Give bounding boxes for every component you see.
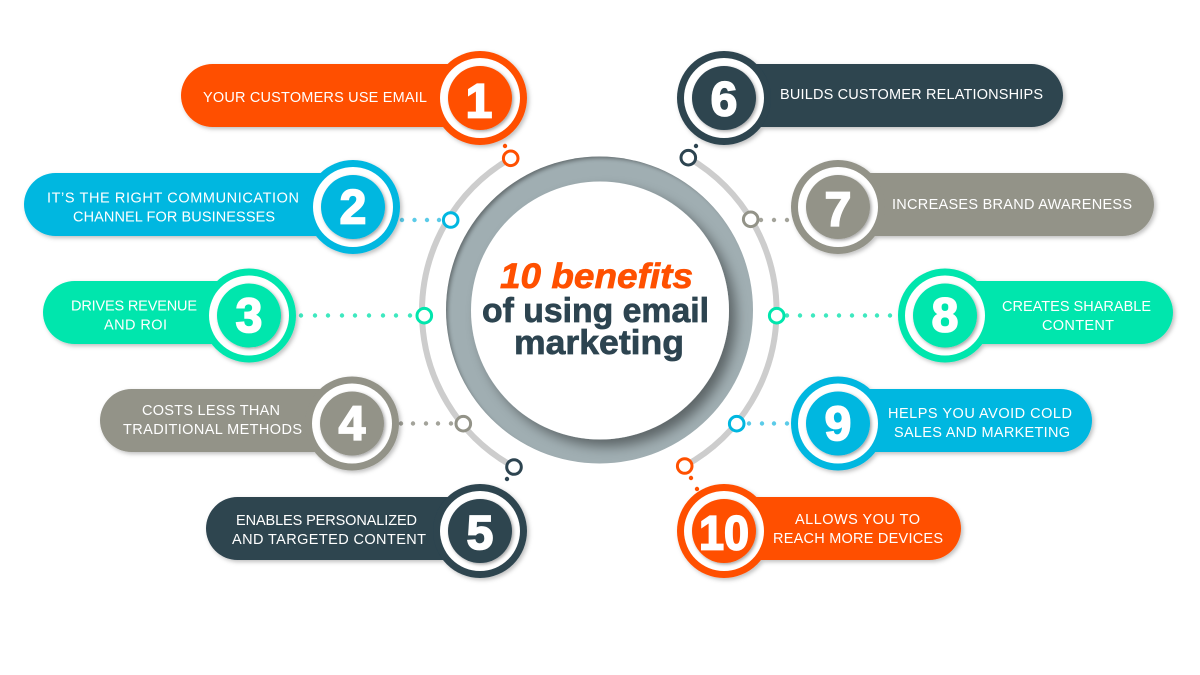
- node 6: [681, 150, 696, 165]
- benefit 8: 8: [932, 290, 958, 342]
- benefit 5: ENABLES PERSONALIZED: [236, 513, 417, 529]
- benefit 8: CREATES SHARABLE: [1002, 299, 1151, 315]
- benefit 6: [677, 51, 1063, 145]
- benefit 9: SALES AND MARKETING: [894, 425, 1070, 441]
- benefit 6: 6: [711, 74, 737, 126]
- dotted connector 10: [689, 476, 699, 491]
- dotted connector 7: [759, 218, 789, 222]
- benefit 5: AND TARGETED CONTENT: [232, 532, 426, 548]
- dotted connector 6: [694, 144, 698, 148]
- node 1: [503, 151, 518, 166]
- central ring: [444, 155, 760, 471]
- benefit 4: [100, 376, 399, 470]
- benefit 8: CONTENT: [1042, 318, 1114, 334]
- benefit 10: ALLOWS YOU TO: [795, 512, 920, 528]
- benefit 10: REACH MORE DEVICES: [773, 531, 943, 547]
- benefit 9: HELPS YOU AVOID COLD: [888, 406, 1072, 422]
- benefit 7: 7: [825, 184, 851, 237]
- node 5: [507, 460, 521, 474]
- dotted connector 8: [785, 313, 892, 318]
- benefit 10: 10: [699, 508, 749, 560]
- node 7: [743, 212, 758, 227]
- node 10: [677, 459, 692, 473]
- benefit 2: [24, 160, 400, 254]
- benefit 8: [898, 268, 1173, 362]
- node 9: [729, 416, 744, 431]
- benefit 4: TRADITIONAL METHODS: [123, 422, 302, 438]
- node 2: [443, 213, 458, 227]
- title: 10 benefits: [500, 257, 693, 296]
- benefit 3: AND ROI: [104, 318, 167, 334]
- benefit 7: INCREASES BRAND AWARENESS: [892, 197, 1132, 213]
- benefit 10: [677, 484, 961, 578]
- benefit 1: YOUR CUSTOMERS USE EMAIL: [203, 90, 427, 106]
- benefit 6: BUILDS CUSTOMER RELATIONSHIPS: [780, 87, 1043, 103]
- node 3: [417, 308, 432, 323]
- benefit 9: [791, 376, 1092, 470]
- node 8: [769, 308, 784, 323]
- dotted connector 1: [503, 144, 507, 148]
- title: of using email: [482, 292, 709, 330]
- dotted connector 9: [747, 421, 789, 426]
- benefit 4: 4: [339, 398, 366, 451]
- dotted connector 5: [505, 477, 509, 481]
- benefit 1: 1: [466, 76, 492, 128]
- dotted connector 4: [399, 421, 453, 426]
- benefit 9: 9: [825, 398, 851, 451]
- dotted connector 2: [400, 218, 441, 222]
- right connector arc: [685, 158, 777, 466]
- left connector arc: [422, 158, 514, 467]
- benefit 4: COSTS LESS THAN: [142, 403, 280, 419]
- benefit 3: [43, 268, 296, 362]
- title: marketing: [514, 324, 684, 362]
- benefit 5: 5: [467, 507, 493, 560]
- node 4: [456, 416, 471, 431]
- title: [482, 257, 709, 362]
- benefit 3: 3: [236, 290, 262, 343]
- benefit 7: [791, 160, 1154, 254]
- benefit 2: IT’S THE RIGHT COMMUNICATION: [47, 190, 299, 206]
- benefit 2: 2: [340, 182, 366, 234]
- benefit 3: DRIVES REVENUE: [71, 298, 197, 314]
- benefit 1: [181, 51, 527, 145]
- dotted connector 3: [299, 313, 412, 318]
- benefit 2: CHANNEL FOR BUSINESSES: [73, 210, 275, 226]
- benefit 5: [206, 484, 527, 578]
